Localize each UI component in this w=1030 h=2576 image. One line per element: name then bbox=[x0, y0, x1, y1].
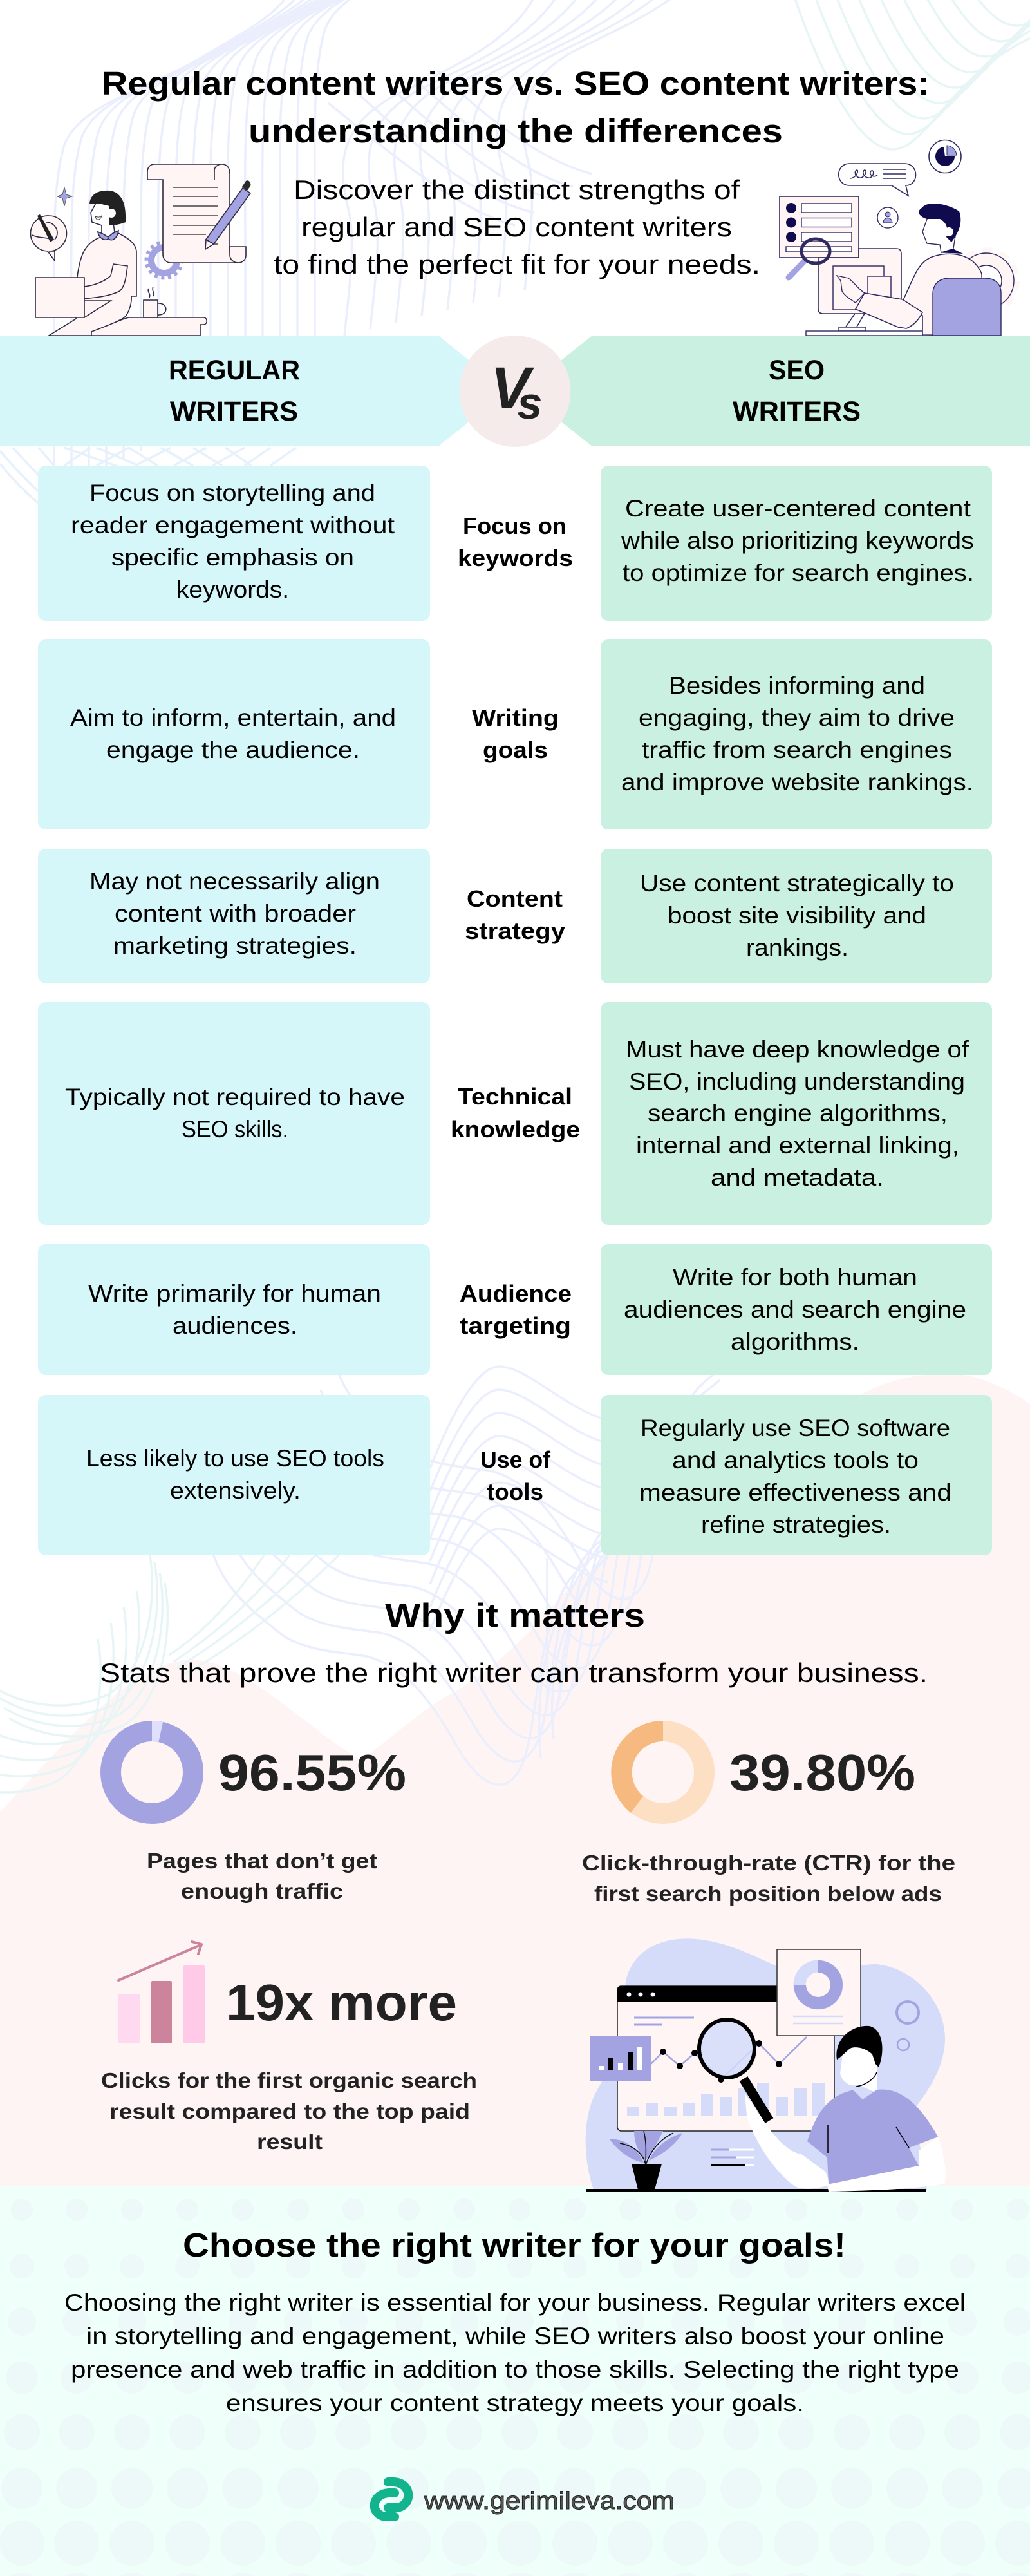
closing paragraph: ensures your content strategy meets your goals. bbox=[226, 2390, 804, 2416]
browser window bbox=[617, 1986, 834, 2131]
heading: choose the right writer: Choose the right writer for your goals! bbox=[183, 2227, 846, 2264]
row label: tools bbox=[487, 1479, 543, 1505]
row label: Audience bbox=[460, 1280, 572, 1307]
icon: logo mark bbox=[375, 2482, 408, 2517]
illustration: woman writing at a laptop bbox=[30, 164, 250, 336]
SEO writers card: and improve website rankings. bbox=[621, 769, 973, 795]
SEO writers card bbox=[601, 1395, 992, 1555]
regular writers card: May not necessarily align bbox=[89, 868, 380, 895]
row: content strategy bbox=[38, 849, 992, 983]
vs badge: V bbox=[491, 355, 534, 421]
vs badge bbox=[460, 336, 570, 447]
donut chart card bbox=[777, 1949, 861, 2036]
SEO writers card: algorithms. bbox=[731, 1329, 859, 1355]
header band: regular writers: WRITERS bbox=[170, 396, 298, 427]
caption bbox=[147, 1849, 377, 1903]
row label bbox=[458, 513, 573, 571]
SEO writers card bbox=[601, 466, 992, 621]
man figure bbox=[837, 204, 1001, 336]
SEO writers card bbox=[601, 1244, 992, 1375]
SEO writers card: Besides informing and bbox=[669, 672, 925, 699]
SEO writers card: Regularly use SEO software bbox=[641, 1415, 950, 1441]
closing paragraph: in storytelling and engagement, while SEO writers also boost your online bbox=[86, 2323, 944, 2349]
icon: gear bbox=[956, 251, 1016, 311]
stat: 19x more: 19x more bbox=[226, 1974, 457, 2031]
SEO writers card: and metadata. bbox=[711, 1164, 884, 1191]
header band: SEO writers: WRITERS bbox=[733, 396, 861, 427]
row label: Use of bbox=[480, 1446, 551, 1473]
header band: regular writers: REGULAR bbox=[169, 355, 300, 386]
row label: strategy bbox=[465, 918, 565, 944]
SEO writers card: while also prioritizing keywords bbox=[621, 527, 974, 554]
header band: SEO writers: SEO bbox=[769, 355, 825, 386]
row label bbox=[451, 1083, 580, 1142]
icon: pie chart badge bbox=[929, 140, 961, 173]
small text lines bbox=[711, 2150, 754, 2165]
donut chart bbox=[611, 1721, 704, 1814]
SEO writers card: search engine algorithms, bbox=[648, 1100, 948, 1126]
subtitle bbox=[274, 175, 760, 279]
SEO writers card: traffic from search engines bbox=[642, 737, 952, 763]
regular writers card bbox=[38, 1002, 430, 1225]
SEO writers card: Must have deep knowledge of bbox=[626, 1036, 969, 1063]
vs badge: s bbox=[517, 378, 542, 428]
title: understanding the differences bbox=[248, 113, 783, 149]
row: focus on keywords bbox=[38, 466, 992, 621]
caption: Clicks for the first organic search bbox=[101, 2069, 477, 2092]
row label bbox=[480, 1446, 551, 1505]
row label bbox=[460, 1280, 572, 1339]
stat: 39.80% bbox=[582, 1721, 955, 1906]
caption bbox=[101, 2069, 477, 2154]
SEO writers card: refine strategies. bbox=[701, 1511, 891, 1538]
closing paragraph: Choosing the right writer is essential for your business. Regular writers excel bbox=[64, 2289, 966, 2316]
illustration: analyst with magnifier and dashboard bbox=[586, 1938, 946, 2192]
regular writers card bbox=[38, 1395, 430, 1555]
icon: speech bubble bbox=[839, 164, 916, 196]
header band: SEO writers bbox=[541, 336, 1030, 446]
regular writers card bbox=[38, 849, 430, 983]
logo bbox=[375, 2482, 675, 2517]
regular writers card: extensively. bbox=[170, 1477, 301, 1504]
row: use of tools bbox=[38, 1395, 992, 1555]
donut chart bbox=[111, 1721, 193, 1814]
stat: 96.55% bbox=[111, 1721, 406, 1903]
regular writers card bbox=[38, 466, 430, 621]
regular writers card: marketing strategies. bbox=[113, 933, 357, 959]
icon: sparkle bbox=[57, 187, 72, 206]
regular writers card: keywords. bbox=[176, 576, 289, 603]
row label: targeting bbox=[460, 1312, 571, 1339]
row label: Technical bbox=[458, 1083, 572, 1110]
row label: knowledge bbox=[451, 1116, 580, 1142]
SEO writers card bbox=[601, 639, 992, 829]
row label: Writing bbox=[472, 705, 559, 731]
title: Regular content writers vs. SEO content writers: bbox=[102, 65, 930, 102]
icon: magnifier bbox=[789, 239, 830, 278]
regular writers card: Write primarily for human bbox=[88, 1280, 381, 1307]
heading: why it matters: Why it matters bbox=[385, 1597, 645, 1634]
row: audience targeting bbox=[38, 1244, 992, 1375]
SEO writers card: rankings. bbox=[746, 934, 848, 961]
regular writers card: SEO skills. bbox=[182, 1116, 288, 1142]
icon: user badge bbox=[877, 207, 898, 228]
row label bbox=[472, 705, 559, 763]
monitor bbox=[806, 249, 922, 336]
caption: result bbox=[257, 2130, 323, 2154]
regular writers card: Typically not required to have bbox=[65, 1084, 405, 1110]
regular writers card: specific emphasis on bbox=[111, 544, 354, 571]
regular writers card bbox=[38, 639, 430, 829]
analyst figure bbox=[745, 2026, 946, 2192]
regular writers card: reader engagement without bbox=[71, 512, 395, 538]
illustration: man at computer bbox=[780, 140, 1016, 336]
stat: 96.55%: 96.55% bbox=[218, 1744, 406, 1801]
caption: result compared to the top paid bbox=[109, 2099, 470, 2123]
stat: 19x more bbox=[101, 1942, 477, 2154]
SEO writers card: audiences and search engine bbox=[624, 1296, 966, 1323]
header band: regular writers bbox=[0, 336, 489, 446]
regular writers card: engage the audience. bbox=[106, 737, 360, 763]
SEO writers card: measure effectiveness and bbox=[639, 1479, 951, 1506]
subtitle: regular and SEO content writers bbox=[301, 212, 732, 242]
row label: keywords bbox=[458, 545, 573, 571]
SEO writers card: SEO, including understanding bbox=[629, 1068, 965, 1095]
closing paragraph bbox=[64, 2289, 966, 2416]
row: technical knowledge bbox=[38, 1002, 992, 1225]
icon: pencil bbox=[205, 180, 250, 249]
SEO writers card bbox=[601, 1002, 992, 1225]
subtitle: Discover the distinct strengths of bbox=[294, 175, 740, 205]
caption: first search position below ads bbox=[594, 1882, 942, 1906]
row label: Focus on bbox=[463, 513, 566, 539]
row label bbox=[465, 886, 565, 944]
pink background region bbox=[0, 1374, 1030, 2186]
icon: paper scroll bbox=[147, 164, 246, 263]
SEO writers card: internal and external linking, bbox=[636, 1132, 959, 1159]
SEO writers card: and analytics tools to bbox=[672, 1447, 919, 1473]
subheading: stats line: Stats that prove the right writer can transform your business. bbox=[100, 1658, 928, 1688]
regular writers card: Focus on storytelling and bbox=[89, 480, 375, 506]
bottom section background bbox=[0, 2186, 1030, 2576]
icon: coffee mug and table bbox=[91, 287, 207, 336]
closing paragraph: presence and web traffic in addition to those skills. Selecting the right type bbox=[71, 2356, 959, 2383]
plant bbox=[610, 2131, 682, 2190]
SEO writers card: engaging, they aim to drive bbox=[639, 705, 955, 731]
regular writers card: Less likely to use SEO tools bbox=[86, 1445, 384, 1472]
regular writers card: content with broader bbox=[115, 900, 356, 927]
row label: Content bbox=[467, 886, 563, 912]
icon: hand writing bubble bbox=[30, 214, 67, 261]
bars card bbox=[590, 2036, 651, 2081]
SEO writers card: Create user-centered content bbox=[625, 495, 971, 522]
bar chart with arrow bbox=[118, 1942, 205, 2043]
stat: 39.80%: 39.80% bbox=[729, 1744, 915, 1801]
caption: Click-through-rate (CTR) for the bbox=[582, 1851, 955, 1875]
regular writers card: audiences. bbox=[173, 1312, 297, 1339]
SEO writers card: Use content strategically to bbox=[640, 870, 954, 896]
decorative rings bbox=[897, 2002, 919, 2050]
SEO writers card: to optimize for search engines. bbox=[623, 560, 974, 586]
caption: Pages that don’t get bbox=[147, 1849, 377, 1873]
regular writers card bbox=[38, 1244, 430, 1375]
SEO writers card: Write for both human bbox=[673, 1264, 917, 1291]
icon: gear bbox=[147, 243, 182, 278]
baseline bbox=[586, 2189, 926, 2192]
SEO writers card: boost site visibility and bbox=[668, 902, 926, 929]
title bbox=[102, 65, 930, 149]
woman figure bbox=[35, 191, 136, 336]
subtitle: to find the perfect fit for your needs. bbox=[274, 249, 760, 279]
blob background bbox=[586, 1938, 945, 2190]
logo: www.gerimileva.com bbox=[424, 2488, 675, 2515]
regular writers card: Aim to inform, entertain, and bbox=[70, 705, 396, 731]
SEO writers card bbox=[601, 849, 992, 983]
row label: goals bbox=[483, 737, 548, 763]
caption bbox=[582, 1851, 955, 1906]
row: writing goals bbox=[38, 639, 992, 829]
icon: form panel bbox=[780, 196, 859, 258]
magnifier bbox=[699, 2020, 769, 2121]
caption: enough traffic bbox=[181, 1879, 343, 1903]
